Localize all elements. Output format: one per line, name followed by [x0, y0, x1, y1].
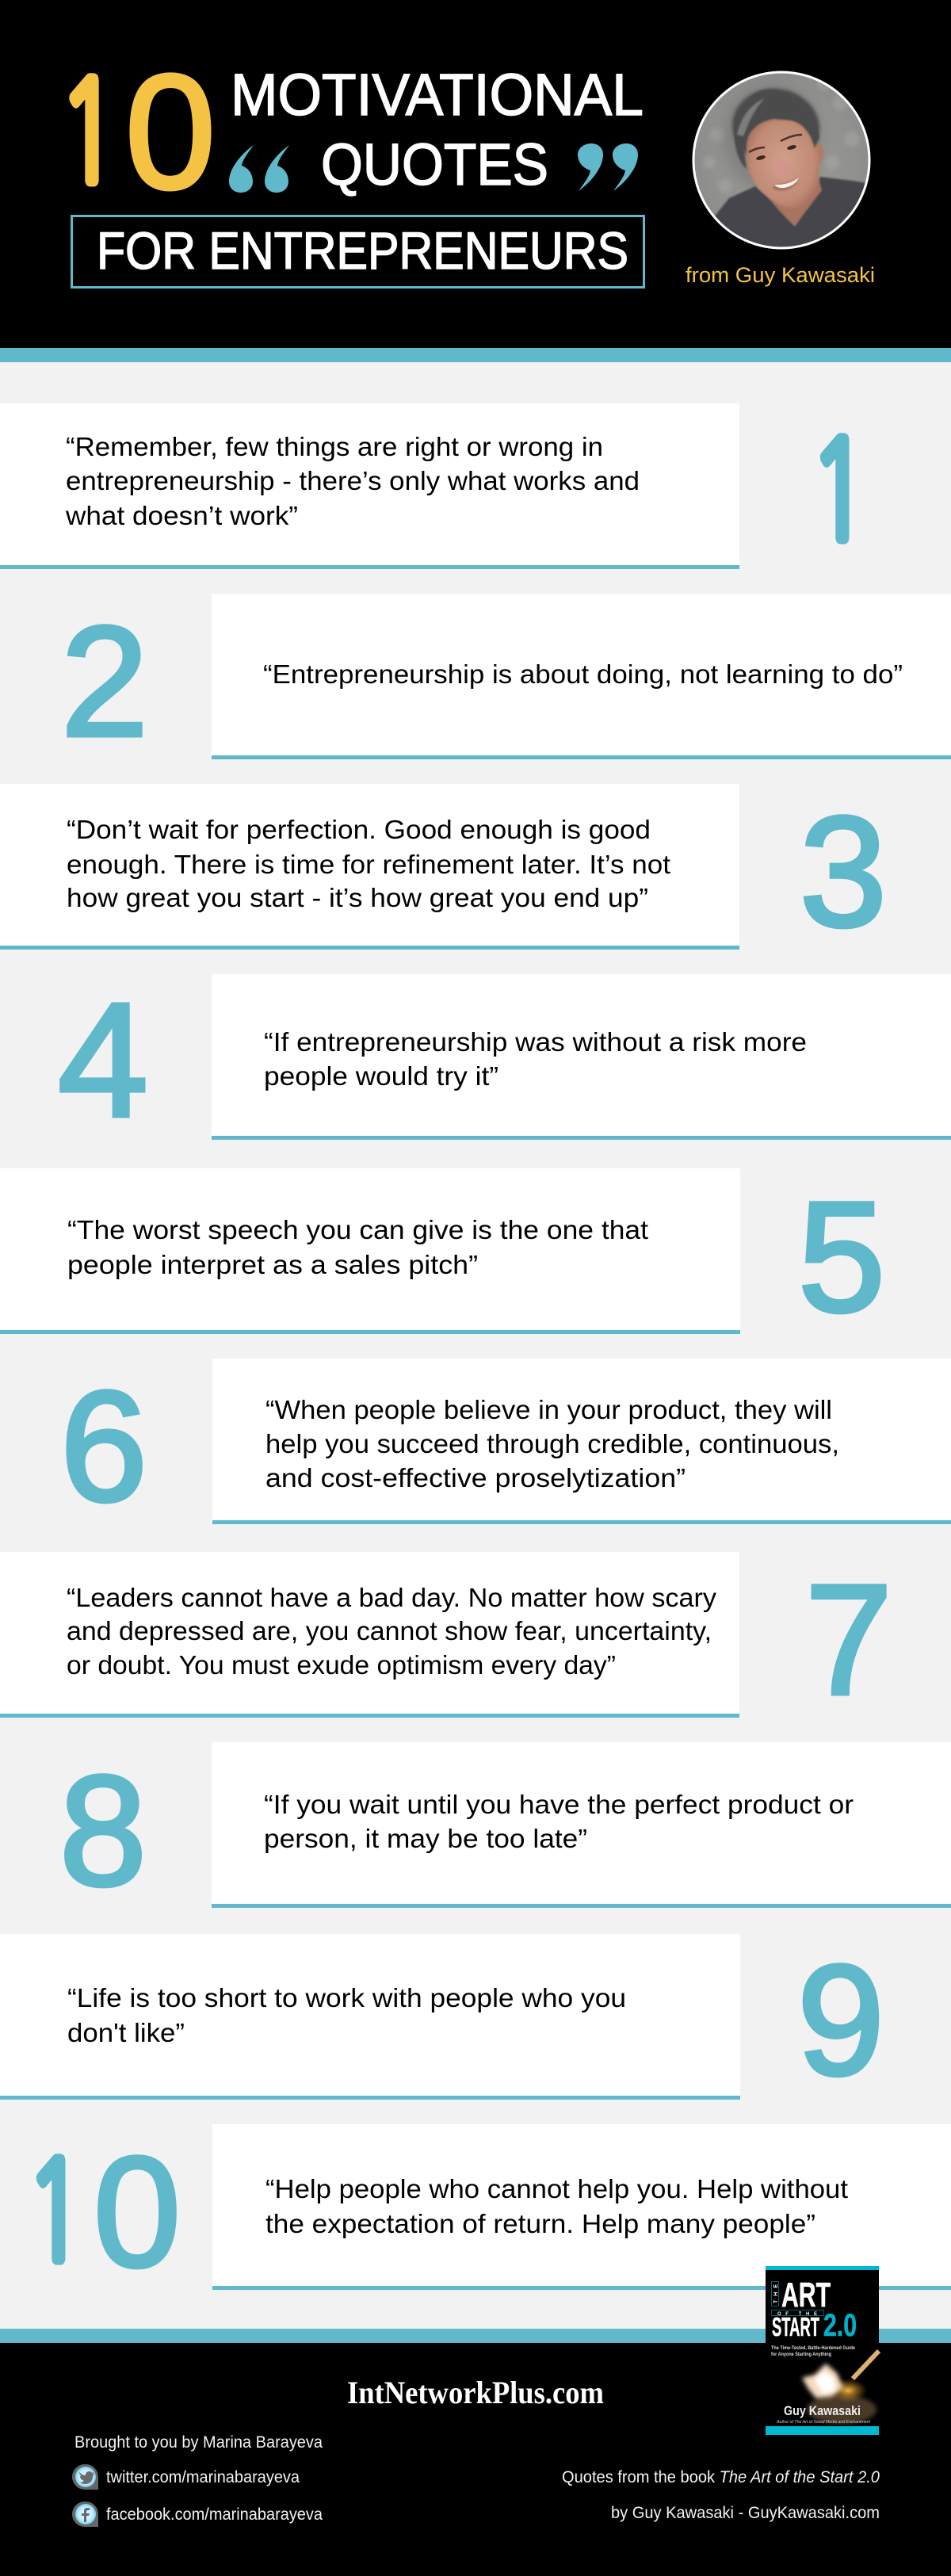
quote 5 text: [67, 1215, 648, 1279]
panel: quote 5: [0, 1168, 885, 1344]
panel: quote 1: [0, 403, 869, 569]
book cover: OF THE: [777, 2312, 817, 2317]
byline: from Guy Kawasaki: [686, 263, 875, 287]
quote 5 text: people interpret as a sales pitch”: [67, 1250, 478, 1279]
quote 4 text: people would try it”: [264, 1061, 498, 1091]
quote 6 text: [265, 1395, 839, 1492]
quote 9 text: “Life is too short to work with people who you: [67, 1983, 626, 2012]
number 3: 3: [800, 784, 887, 959]
quote 3 text: [67, 815, 670, 912]
panel: quote 8: [59, 1742, 951, 1918]
title number 10: 0: [125, 41, 216, 223]
credit line: Brought to you by Marina Barayeva: [74, 2433, 323, 2452]
quote 5 text: “The worst speech you can give is the one that: [67, 1215, 648, 1244]
quote 7 text: [67, 1583, 717, 1680]
quote 4 text: “If entrepreneurship was without a risk more: [264, 1027, 807, 1057]
number 5: 5: [798, 1169, 885, 1344]
panel: quote 6: [60, 1359, 951, 1534]
icon: opening quote mark: [229, 145, 289, 193]
panel: quote 3: [0, 784, 887, 959]
book cover: Author of The Art of Social Media and Enchantment: [776, 2420, 871, 2425]
quote 9 text: don't like”: [67, 2018, 185, 2047]
quote 4 text: [264, 1027, 807, 1091]
number 6: 6: [60, 1359, 147, 1534]
book credit: by Guy Kawasaki - GuyKawasaki.com: [611, 2504, 880, 2522]
quote 9 text: [67, 1983, 626, 2047]
twitter link: twitter.com/marinabarayeva: [106, 2468, 300, 2486]
quote 8 text: “If you wait until you have the perfect product or: [264, 1790, 854, 1819]
book cover: START: [772, 2312, 819, 2341]
quote 6 text: and cost-effective proselytization”: [265, 1463, 686, 1492]
book credit: Quotes from the book The Art of the Start 2.0: [562, 2468, 880, 2486]
book cover: ART: [781, 2276, 831, 2314]
title number 10: 1: [59, 63, 119, 202]
title: quotes: QUOTES: [321, 132, 548, 197]
quote 7 text: and depressed are, you cannot show fear, uncertainty,: [67, 1616, 712, 1645]
icon: closing quote mark: [578, 143, 638, 191]
quote 7 text: “Leaders cannot have a bad day. No matter how scary: [67, 1583, 717, 1612]
number 7: 7: [805, 1552, 892, 1727]
quote 1 text: “Remember, few things are right or wrong in: [66, 432, 603, 461]
quote 3 text: how great you start - it’s how great you end up”: [67, 883, 648, 912]
quote 10 text: “Help people who cannot help you. Help without: [265, 2174, 848, 2203]
panel: quote 9: [0, 1932, 884, 2108]
title box: for entrepreneurs: FOR ENTREPRENEURS: [97, 221, 628, 280]
number 9: 9: [797, 1932, 884, 2108]
quote 2 text: “Entrepreneurship is about doing, not learning to do”: [263, 659, 903, 689]
quote 6 text: help you succeed through credible, continuous,: [265, 1429, 839, 1458]
title number 10: [59, 41, 216, 223]
quote 1 text: entrepreneurship - there’s only what works and: [66, 466, 640, 495]
quote 8 text: [264, 1790, 854, 1853]
icon: twitter: [72, 2464, 98, 2490]
icon: facebook: [72, 2501, 98, 2527]
facebook link: facebook.com/marinabarayeva: [106, 2505, 323, 2524]
quote 10 text: the expectation of return. Help many people”: [265, 2209, 815, 2238]
quote 8 text: person, it may be too late”: [264, 1824, 587, 1853]
number 2: 2: [61, 594, 148, 769]
panel: quote 7: [0, 1552, 892, 1727]
quote 1 text: what doesn’t work”: [65, 501, 298, 530]
book cover: [766, 2266, 879, 2436]
title: motivational: MOTIVATIONAL: [231, 62, 644, 128]
book credit: [562, 2468, 880, 2522]
quote 10 text: [265, 2174, 848, 2238]
number 1: 1: [809, 422, 869, 559]
panel: quote 4: [58, 969, 951, 1151]
quote 3 text: enough. There is time for refinement later. It’s not: [67, 850, 670, 879]
book cover: 2.0: [823, 2308, 857, 2343]
book cover: for Anyone Starting Anything: [771, 2352, 831, 2357]
book cover: The Time-Tested, Battle-Hardened Guide: [771, 2346, 856, 2351]
number 10: [25, 2124, 181, 2299]
panel: quote 2: [61, 594, 951, 769]
book cover: Guy Kawasaki: [784, 2403, 861, 2418]
panel: quote 10: [25, 2124, 951, 2299]
quote 3 text: “Don’t wait for perfection. Good enough is good: [67, 815, 651, 844]
quote 1 text: [65, 432, 640, 530]
number 4: 4: [58, 969, 148, 1151]
number 10: 1: [25, 2143, 86, 2280]
portrait photo of Guy Kawasaki: [693, 71, 870, 249]
footer: [0, 2329, 951, 2576]
site name: IntNetworkPlus.com: [347, 2375, 604, 2410]
number 10: 0: [94, 2124, 181, 2299]
book cover: THE: [773, 2284, 779, 2303]
quote 7 text: or doubt. You must exude optimism every day”: [67, 1650, 616, 1680]
quote 6 text: “When people believe in your product, they will: [265, 1395, 832, 1424]
header: [0, 0, 951, 362]
number 8: 8: [59, 1743, 147, 1918]
